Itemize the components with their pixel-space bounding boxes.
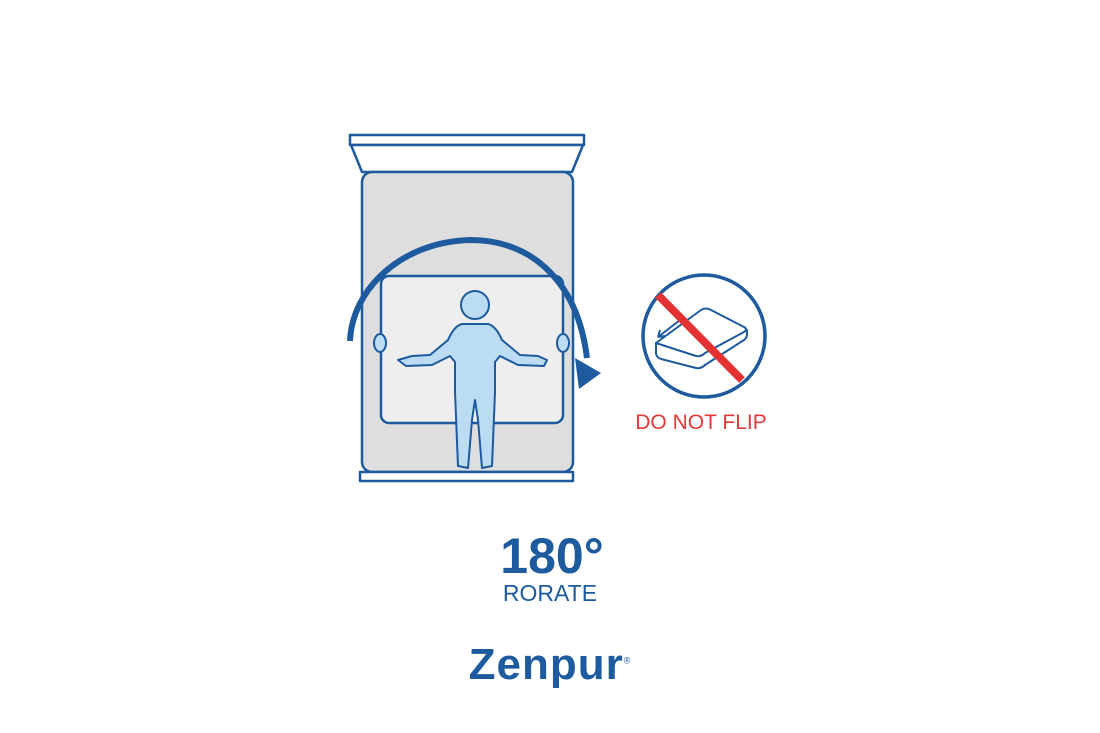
subheading: rorate: RORATE	[503, 580, 597, 606]
logo: Zenpur: Zenpur®	[469, 640, 631, 689]
rotation arrow	[350, 240, 601, 389]
bed	[350, 135, 584, 481]
person	[374, 291, 569, 468]
label: do not flip: DO NOT FLIP	[635, 411, 767, 434]
icon: do not flip	[641, 273, 767, 399]
heading: 180°: 180°	[500, 528, 604, 584]
